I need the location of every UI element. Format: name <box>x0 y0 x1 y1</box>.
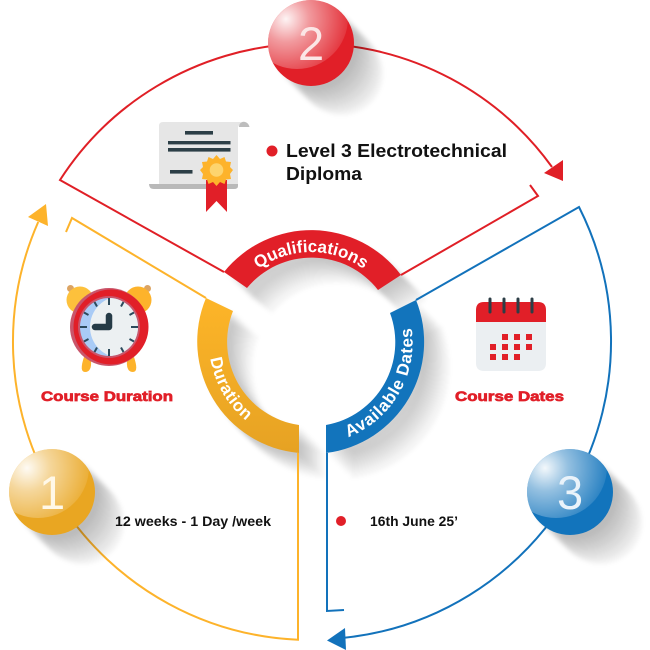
icon: alarm clock <box>66 285 152 372</box>
band: Qualifications <box>224 230 401 290</box>
band: Duration: Duration <box>210 356 250 420</box>
text: qualification: Diploma <box>286 164 363 184</box>
text: date detail: 16th June 25’ <box>370 514 458 529</box>
text: qualification: Level 3 Electrotechnical <box>286 141 507 161</box>
text: duration detail: 12 weeks - 1 Day /week <box>115 514 272 529</box>
label: course dates: Course Dates <box>455 388 564 404</box>
blue outer outline with arrow <box>327 207 611 650</box>
icon: certificate <box>149 122 250 212</box>
ball 3 <box>527 449 642 564</box>
band: Available Dates: Available Dates <box>348 328 413 438</box>
ball 1: 1 <box>39 466 65 519</box>
ball 2 <box>268 0 382 114</box>
ball 3: 3 <box>557 466 583 519</box>
band: Available Dates <box>326 300 424 453</box>
text: qualification <box>286 141 507 184</box>
bullet: qualification <box>266 146 278 156</box>
band: Duration <box>197 298 299 453</box>
bullet: date <box>336 516 346 526</box>
ball 2: 2 <box>298 17 324 70</box>
icon: calendar <box>476 299 546 371</box>
ball 1 <box>9 449 124 564</box>
band shadows <box>201 234 449 478</box>
orange outer outline with arrow <box>13 204 298 640</box>
label: course duration: Course Duration <box>41 388 173 404</box>
red outer outline with arrow <box>60 44 563 275</box>
band: Qualifications: Qualifications <box>254 240 367 268</box>
